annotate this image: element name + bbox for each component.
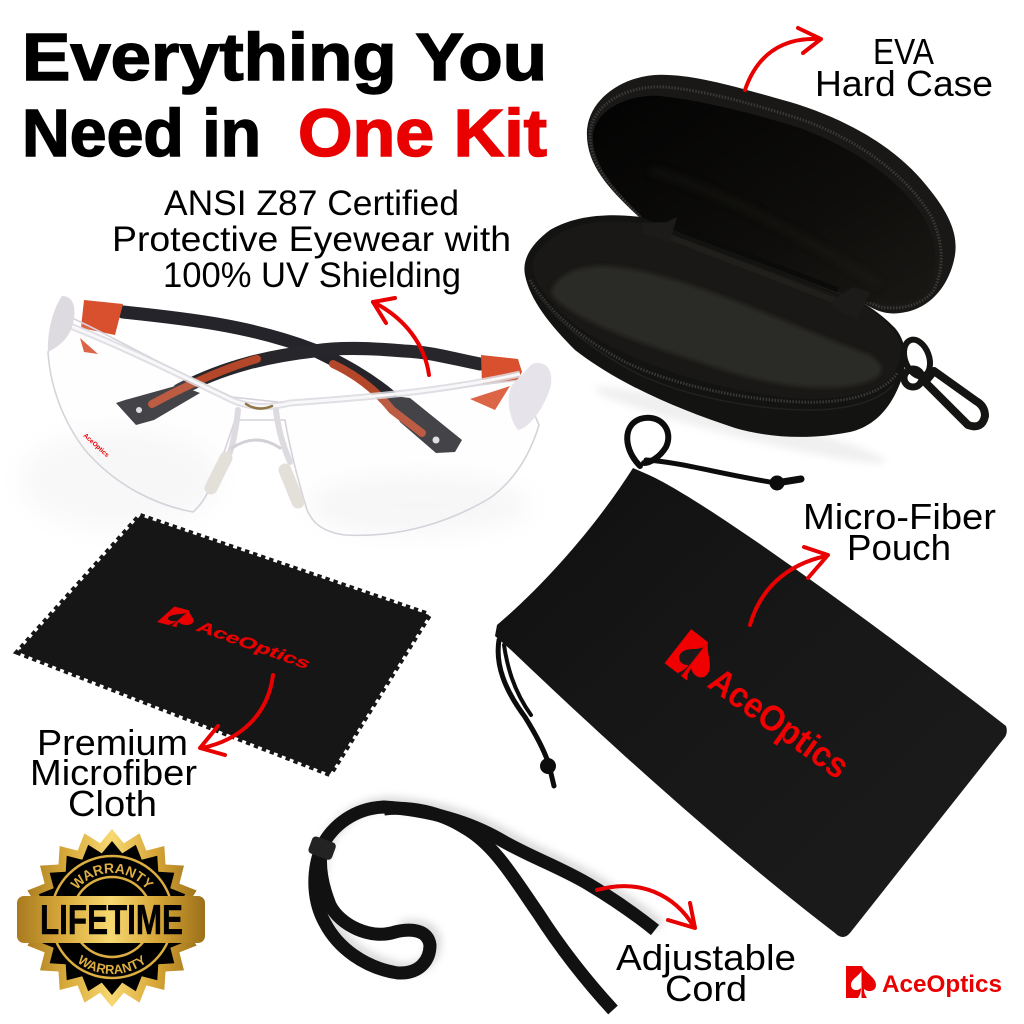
label: hard case: EVA bbox=[873, 31, 934, 72]
front temple arm bbox=[116, 348, 480, 425]
title: Need in bbox=[22, 96, 261, 171]
pouch logo text: AceOptics bbox=[701, 659, 857, 787]
label: eyewear: 100% UV Shielding bbox=[163, 256, 461, 295]
label: hard case: Hard Case bbox=[815, 63, 993, 104]
badge black star bbox=[35, 841, 189, 995]
label: eyewear: ANSI Z87 Certified bbox=[164, 184, 459, 223]
label: cloth bbox=[30, 722, 197, 824]
label: eyewear: Protective Eyewear with bbox=[112, 220, 511, 259]
arrow: cord bbox=[597, 886, 695, 928]
logo wordmark: AceOptics bbox=[882, 971, 1002, 998]
lifetime text: LIFETIME bbox=[40, 896, 183, 943]
badge band bbox=[17, 896, 205, 943]
label: cord: Adjustable bbox=[616, 937, 796, 978]
brow bar bbox=[60, 322, 520, 406]
warranty bottom: WARRANTY bbox=[78, 954, 144, 974]
adjustable cord bbox=[307, 803, 660, 1010]
orange temple tips bbox=[80, 300, 522, 410]
case hook bbox=[899, 336, 985, 426]
warranty top: WARRANTY bbox=[70, 863, 154, 888]
pouch bbox=[495, 418, 1007, 937]
cord shadow bbox=[320, 803, 660, 969]
base floor bbox=[552, 266, 881, 388]
badge gold star bbox=[23, 829, 201, 1007]
label: cord bbox=[616, 937, 796, 1009]
title: Everything You bbox=[22, 20, 547, 95]
cloth logo text: AceOptics bbox=[192, 618, 315, 672]
label: cord: Cord bbox=[665, 968, 747, 1009]
cleaning cloth bbox=[18, 516, 429, 774]
pouch cords bbox=[498, 418, 801, 786]
label: cloth: Cloth bbox=[68, 783, 157, 824]
cord slider bbox=[307, 835, 337, 861]
hinge tabs bbox=[642, 217, 870, 320]
badge rings bbox=[51, 856, 173, 978]
title: One Kit bbox=[298, 96, 547, 171]
label: eyewear bbox=[112, 184, 511, 295]
arrow: cloth bbox=[200, 675, 273, 755]
label: cloth: Premium bbox=[37, 722, 188, 763]
clear hinge left bbox=[48, 296, 74, 352]
case lid bbox=[587, 75, 956, 313]
nose bridge bbox=[211, 404, 298, 502]
cord strap bbox=[315, 807, 655, 1010]
label: pouch: Pouch bbox=[847, 527, 951, 568]
hard case bbox=[524, 75, 985, 473]
lid interior bbox=[593, 96, 935, 303]
hinge bar bbox=[672, 226, 838, 290]
pouch body bbox=[495, 468, 1007, 937]
label: pouch bbox=[803, 496, 996, 568]
base interior bbox=[532, 221, 901, 399]
brand logo bbox=[846, 966, 1002, 998]
lid zipper bbox=[590, 87, 941, 308]
lens bbox=[48, 318, 539, 535]
arrow: eyewear bbox=[373, 298, 429, 375]
rear temple arm bbox=[123, 312, 462, 453]
base zipper bbox=[530, 280, 898, 402]
safety glasses bbox=[48, 296, 551, 535]
title bbox=[22, 20, 547, 171]
lifetime warranty badge bbox=[17, 829, 205, 1007]
clear hinge right bbox=[509, 363, 551, 430]
arrow: pouch bbox=[750, 547, 828, 625]
label: cloth: Microfiber bbox=[30, 752, 197, 793]
label: pouch: Micro-Fiber bbox=[803, 496, 996, 537]
arrow: hard case bbox=[745, 28, 821, 90]
logo icon bbox=[846, 966, 876, 998]
label: hard case bbox=[815, 31, 993, 104]
cloth logo icon bbox=[157, 606, 203, 630]
lens logo: AceOptics bbox=[82, 432, 110, 459]
pouch logo icon bbox=[665, 629, 723, 688]
case base bbox=[524, 215, 905, 437]
